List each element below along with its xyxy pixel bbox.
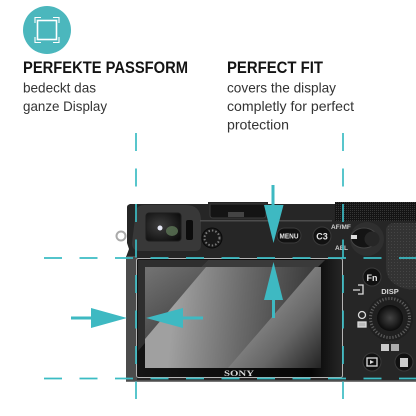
left grip	[126, 256, 137, 380]
arrow: down	[264, 185, 284, 243]
heading: German: PERFEKTE PASSFORM	[23, 59, 188, 77]
dark top glass band	[138, 260, 208, 351]
heading: English: PERFECT FIT	[227, 59, 323, 77]
LCD panel	[145, 267, 321, 368]
camera body	[126, 202, 416, 382]
camera strap lug	[116, 232, 126, 240]
playback button	[363, 353, 381, 371]
label icon: export	[353, 285, 363, 294]
Fn button	[363, 268, 381, 286]
AF/MF and AEL labels: AEL	[335, 245, 348, 252]
AF/MF joystick	[350, 222, 384, 256]
display	[136, 258, 342, 378]
arrow: up	[264, 262, 283, 318]
control wheel	[202, 228, 222, 248]
C3 button: C3	[316, 232, 328, 242]
text: English description: covers the display	[227, 80, 336, 96]
mode dial	[335, 202, 416, 221]
small icons	[381, 344, 389, 351]
text: German description: bedeckt das	[23, 80, 96, 96]
lower right glare	[228, 267, 321, 368]
text: English description: completly for perfect	[227, 98, 354, 114]
camera back	[116, 202, 416, 382]
DISP label: DISP	[381, 287, 399, 296]
dashed guide lines	[44, 133, 416, 399]
SONY logo: SONY	[224, 369, 254, 378]
body bottom edge	[126, 380, 416, 382]
arrow: left	[146, 308, 203, 328]
AF/MF and AEL labels: AF/MF	[331, 224, 351, 231]
text: English description	[227, 80, 354, 132]
arrow: right	[71, 308, 127, 328]
C3 button	[313, 227, 331, 245]
control dial	[367, 295, 413, 341]
text: German description	[23, 80, 107, 114]
AF/MF and AEL labels	[331, 224, 351, 252]
icon: fit frame badge	[23, 6, 71, 54]
text: English description: protection	[227, 116, 289, 132]
leather grip	[386, 223, 416, 289]
MENU button: MENU	[280, 234, 298, 240]
hot shoe	[210, 204, 266, 218]
viewfinder eyecup	[132, 205, 201, 251]
delete button	[395, 353, 413, 371]
left glass reflection	[145, 267, 206, 339]
text: German description: ganze Display	[23, 98, 107, 114]
timer icon	[358, 312, 366, 327]
display frame	[136, 258, 342, 378]
Fn button: Fn	[366, 273, 378, 283]
MENU button	[277, 228, 301, 243]
